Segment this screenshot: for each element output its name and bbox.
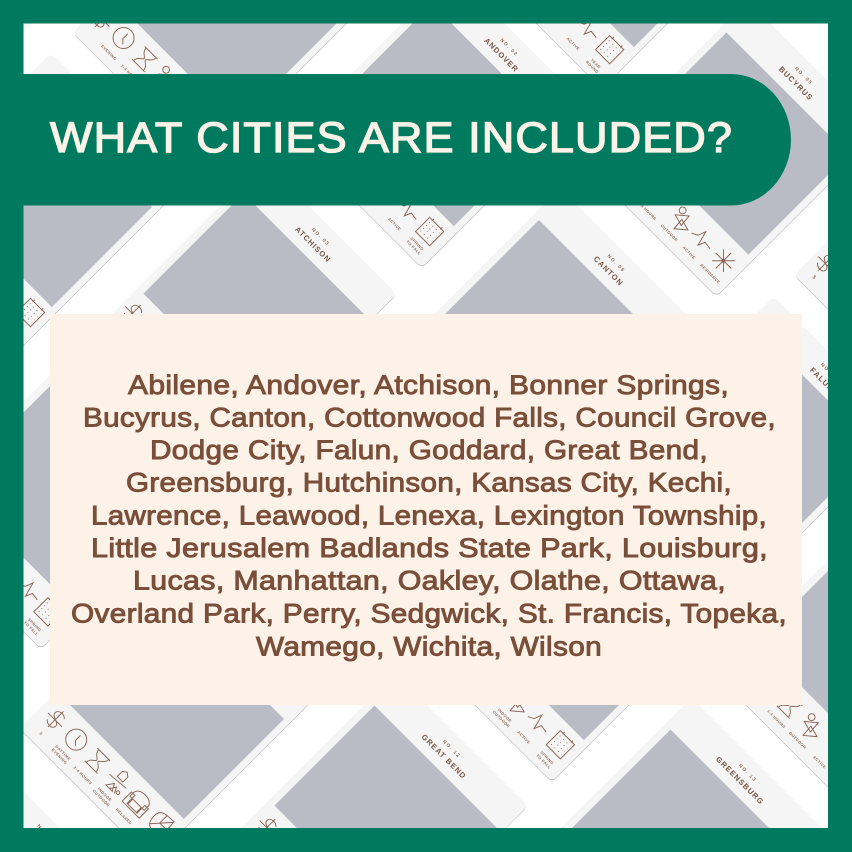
card: no. 06 Canton [396, 188, 693, 485]
title: WHAT CITIES ARE INCLUDED? [50, 115, 733, 162]
card: upper centre icon strip: YEAR [590, 57, 602, 70]
card: lower left, six icon strip [20, 565, 315, 846]
card: no. 01 Abilene: 1-4 HOURS [120, 63, 141, 84]
card: no. 01 Abilene: EVENING [100, 44, 118, 61]
text block: city names: Overland Park, Perry, Sedgwick, St. Francis, Topeka, [71, 598, 787, 628]
text block: city names: Lawrence, Leawood, Lenexa, Lexington Township, [91, 500, 767, 530]
card: no. 02 Andover: ACTIVE [387, 216, 402, 232]
card: no. 05 Bucyrus: BUCYRUS [777, 65, 815, 103]
card: no. 02 Andover: ANDOVER [482, 36, 521, 74]
card: lower left, six icon strip: OUTDOOR [92, 788, 111, 808]
card: no. 11 Goddard: SPRING [539, 750, 555, 766]
card: no. 11 Goddard: INDOOR [497, 707, 513, 724]
card: top left corner sliver [0, 0, 111, 107]
card: lower left, six icon strip: 2-4 HOURS [73, 765, 93, 786]
card: left edge, pulse and grid icons: TO FALL [23, 620, 40, 637]
card: no. 05 Bucyrus: OUTDOOR [660, 223, 679, 243]
card: right edge, lower icon strip: OUTDOOR [788, 730, 808, 750]
card: upper centre icon strip: ACTIVE [566, 36, 581, 51]
card: left edge, pulse and grid icons: SPRING [27, 617, 43, 633]
card: no. 11 Goddard: TO FALL [535, 753, 552, 770]
card: no. 06 Canton: NO. 06 [606, 253, 626, 274]
card: no. 12 Great Bend: NO. 12 [441, 739, 462, 759]
text block: city names [71, 370, 787, 662]
card: right edge, lower icon strip [714, 510, 852, 807]
card: upper centre icon strip [469, 0, 766, 90]
text block: city names: Lucas, Manhattan, Oakley, Olathe, Ottawa, [133, 566, 726, 596]
card: no. 05 Bucyrus: RESIDENCE [699, 263, 721, 285]
text block: city names: Abilene, Andover, Atchison, Bonner Springs, [128, 370, 729, 400]
card: no. 03 Atchison: NO. 03 [310, 227, 331, 247]
card: no. 12 Great Bend: GREAT BEND [420, 732, 468, 781]
card: no. 03 Atchison: ATCHISON [293, 225, 333, 264]
card: no. 13 Greensburg: GREENSBURG [714, 755, 766, 807]
card: no. 10 Falun [610, 296, 852, 593]
card: lower left, six icon strip: EVENING [51, 747, 69, 765]
text block: city names: Greensburg, Hutchinson, Kansas City, Kechi, [126, 468, 732, 498]
card: no. 01 Abilene [72, 0, 369, 166]
card: no. 10 Falun: FALUN [808, 366, 836, 393]
card: right edge, lower icon strip: ACTIVE [812, 754, 827, 770]
card: no. 11 Goddard: OUTDOOR [492, 709, 511, 729]
card: no. 05 Bucyrus: 1.5 HOURS [637, 201, 658, 221]
card: no. 02 Andover: SPRING [409, 236, 425, 252]
card: no. 11 Goddard: ACTIVE [516, 730, 532, 745]
card: lower left, six icon strip: INDOOR [97, 786, 113, 803]
card: lower left, six icon strip: DAYTIME [54, 744, 72, 762]
text block: city names: Wamego, Wichita, Wilson [256, 632, 602, 662]
card: no. 06 Canton: CANTON [592, 254, 625, 288]
card: right edge, dollar icon [794, 112, 852, 408]
card: no. 05 Bucyrus [584, 0, 852, 297]
text block: city names: Dodge City, Falun, Goddard, Great Bend, [150, 435, 708, 465]
title banner [0, 74, 791, 206]
card: no. 13 Greensburg [549, 698, 822, 840]
text block: city names: Bucyrus, Canton, Cottonwood Falls, Council Grove, [83, 402, 776, 432]
card: no. 05 Bucyrus: NO. 05 [793, 66, 814, 86]
card: no. 11 Goddard [419, 486, 716, 783]
card: upper centre icon strip: ROUND [585, 59, 600, 75]
card: right edge, dollar icon: $ [811, 274, 817, 281]
panel: list of cities [50, 314, 802, 705]
card: no. 05 Bucyrus: ACTIVE [682, 245, 697, 260]
card: no. 12 Great Bend [232, 674, 526, 842]
card: no. 02 Andover: NO. 02 [499, 37, 519, 58]
card: lower left, six icon strip: $ [39, 731, 44, 737]
card: left edge, pulse and grid icons [0, 353, 205, 650]
card: no. 13 Greensburg: NO. 13 [737, 763, 758, 783]
card: no. 02 Andover: TO FALL [405, 239, 422, 256]
card: no. 10 Falun: NO. 10 [819, 362, 840, 382]
text block: city names: Little Jerusalem Badlands State Park, Louisburg, [91, 533, 768, 563]
card: no. 09 bottom left corner [0, 758, 72, 844]
card: no. 09 bottom left corner: NO. 09 [36, 823, 56, 844]
card: right edge, lower icon strip: 1-4 HOURS [766, 709, 787, 729]
card: left, grid icon [0, 53, 184, 350]
card: no. 03 Atchison [101, 162, 397, 458]
card: lower left, six icon strip: RELAXED [115, 807, 133, 826]
card: no. 02 Andover [289, 0, 586, 269]
